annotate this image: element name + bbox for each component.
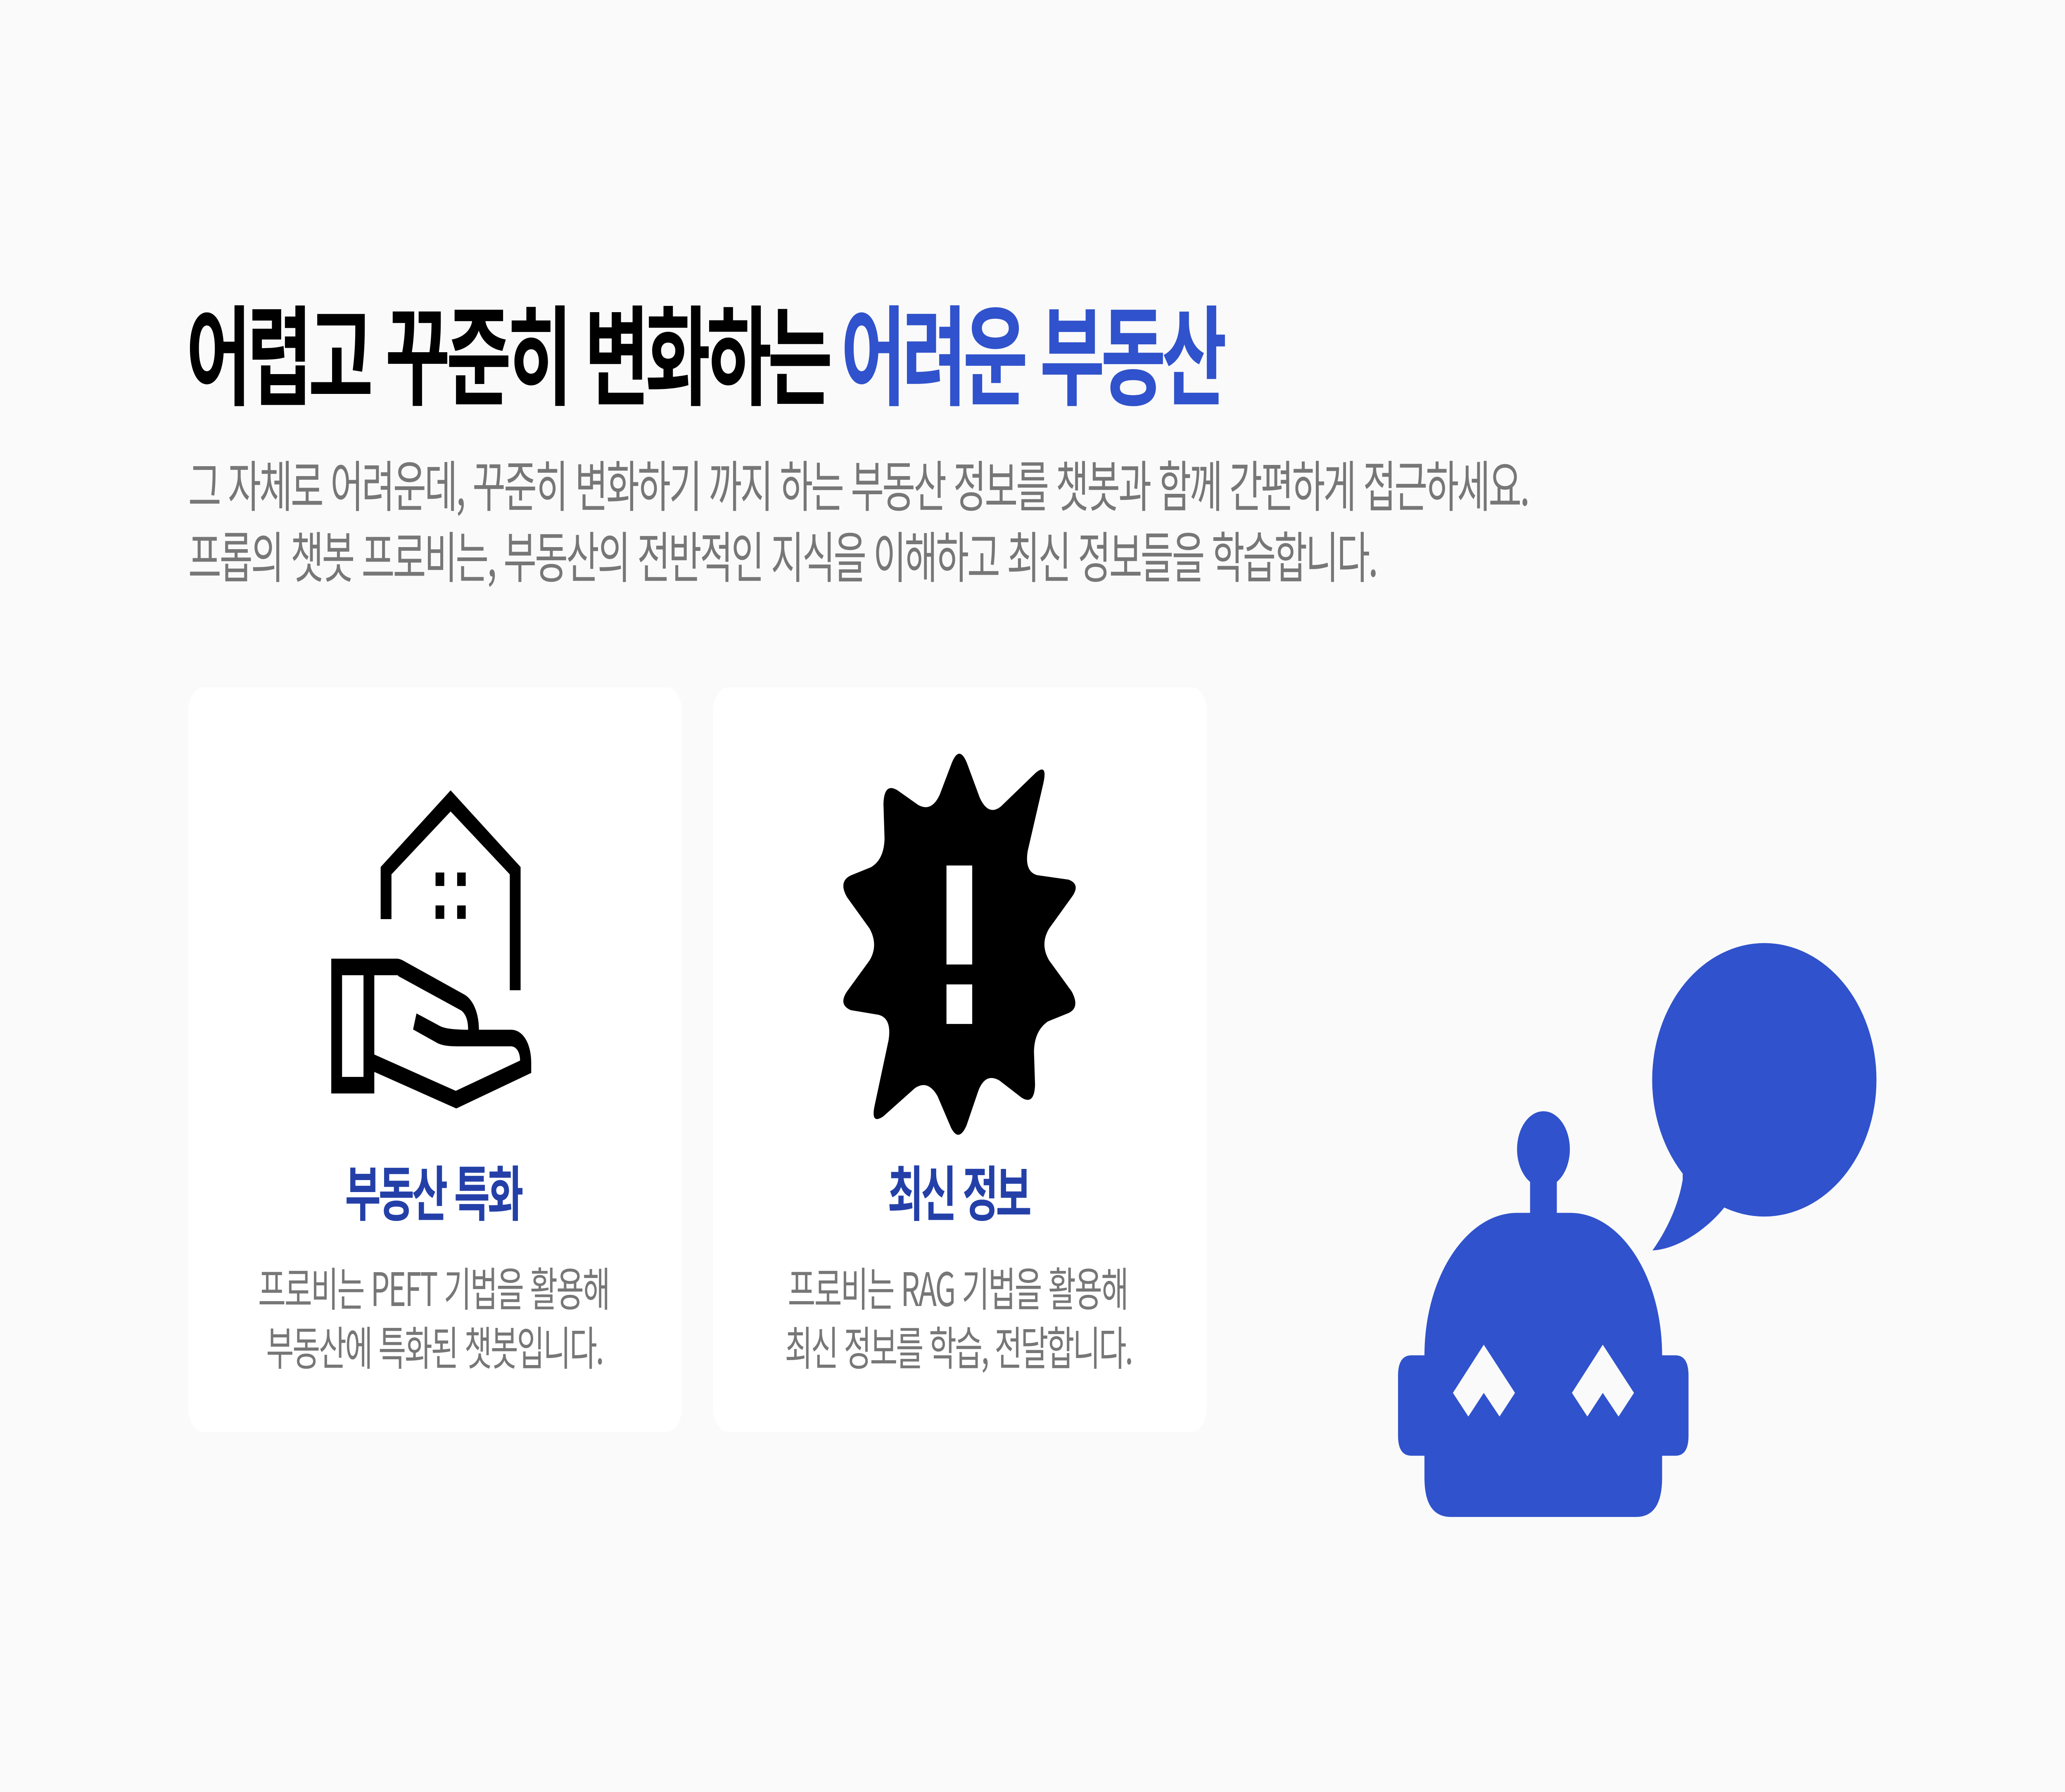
card description: 프로비는 PEFT 기법을 활용해	[258, 1253, 610, 1320]
title: 어려운 부동산	[841, 270, 1227, 428]
card description: 최신 정보를 학습, 전달합니다.	[785, 1312, 1133, 1379]
card description: 프로비는 RAG 기법을 활용해	[788, 1253, 1129, 1320]
icon: burst with exclamation mark	[843, 754, 1076, 1135]
icon: hand holding house	[331, 790, 531, 1109]
title	[186, 270, 1227, 428]
speech bubble	[1652, 943, 1876, 1250]
subtitle text block: 그 자체로 어려운데, 꾸준히 변화하기 까지 하는 부동산 정보를 챗봇과 함께 간편하게 접근하세요.	[188, 443, 1530, 523]
title: 어렵고 꾸준히 변화하는	[186, 270, 833, 428]
card heading: 최신 정보	[888, 1147, 1032, 1233]
icon: robot with speech bubble	[1398, 943, 1876, 1517]
robot head	[1398, 1111, 1688, 1517]
subtitle text block: 프롭의 챗봇 프로비는, 부동산의 전반적인 지식을 이해하고 최신 정보들을 학습합니다.	[188, 514, 1378, 594]
subtitle text block	[188, 443, 1530, 594]
card description	[785, 1253, 1133, 1379]
card description	[258, 1253, 610, 1379]
card description: 부동산에 특화된 챗봇입니다.	[266, 1312, 604, 1379]
panel: latest information	[713, 687, 1207, 1432]
robot eyes	[1453, 1345, 1634, 1417]
panel: real estate specialization	[188, 687, 682, 1432]
card heading: 부동산 특화	[345, 1147, 524, 1233]
